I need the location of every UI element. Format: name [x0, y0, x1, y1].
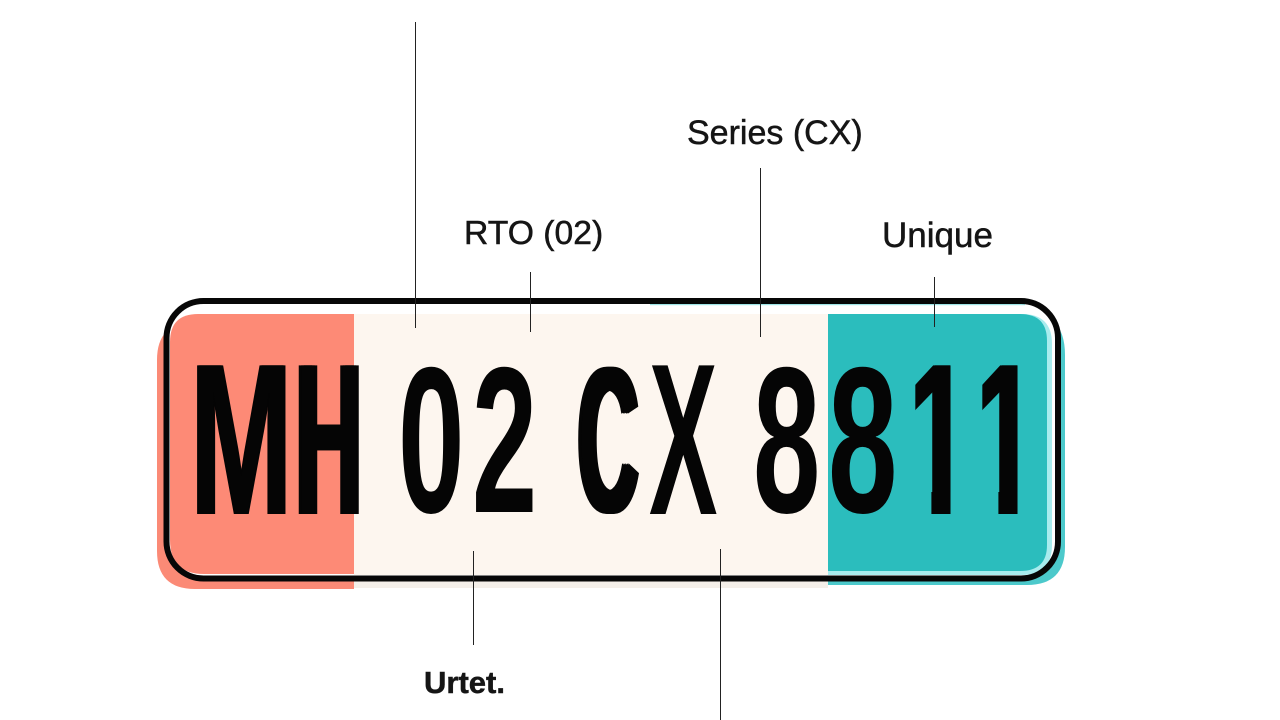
plate interior — [166, 301, 1058, 578]
teal light edge — [828, 314, 1052, 575]
label: unique: Unique — [882, 216, 993, 255]
plate outline — [166, 301, 1058, 578]
text: X — [649, 318, 717, 560]
leader line: state — [414, 22, 416, 328]
leader line: RTO — [530, 272, 531, 332]
text: 8 — [753, 325, 821, 557]
text: H — [295, 318, 363, 560]
cream section — [354, 314, 828, 575]
text: 1 — [902, 318, 974, 560]
leader line: series — [760, 168, 761, 337]
label: lower left: Urtet. — [424, 665, 505, 700]
plate characters: 02 — [398, 325, 537, 557]
text: M — [190, 318, 292, 560]
leader line: unique — [934, 277, 935, 327]
plate characters: 8811 — [753, 325, 1018, 557]
text: 2 — [472, 325, 537, 557]
leader line: lower right — [720, 549, 721, 720]
coral section — [170, 314, 354, 574]
plate characters: MH — [190, 318, 363, 560]
label: RTO: RTO (02) — [464, 214, 603, 252]
leader line: lower left — [472, 551, 474, 645]
text: 1 — [969, 318, 1041, 560]
teal section — [828, 314, 1047, 571]
plate characters: CX — [578, 318, 717, 560]
cream offset shadow — [354, 576, 828, 588]
coral offset shadow — [157, 322, 354, 589]
teal hairline under top edge — [650, 304, 1025, 305]
text: 0 — [398, 325, 464, 557]
label: series: Series (CX) — [687, 114, 863, 152]
teal offset shadow — [828, 310, 1065, 585]
text: 8 — [828, 325, 897, 557]
text: C — [578, 325, 638, 557]
